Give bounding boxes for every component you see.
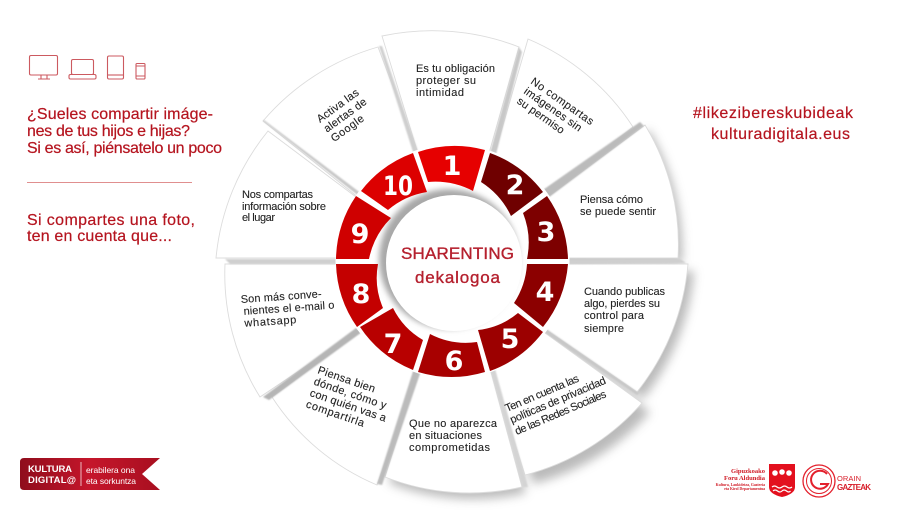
- segment 5: [478, 313, 543, 371]
- text: panel 3: Piensa cómo: [580, 194, 643, 206]
- text: panel 3: [580, 194, 656, 218]
- segment 8: [336, 264, 383, 327]
- text: panel 9: el lugar: [242, 212, 275, 224]
- text: panel 3: se puede sentir: [580, 206, 656, 218]
- text: panel 2: [515, 76, 596, 148]
- icon: monitor: [30, 56, 58, 79]
- text: panel 1: proteger su: [416, 75, 476, 87]
- ring segments: [336, 146, 568, 377]
- icon: G ring: [803, 465, 835, 497]
- logo: Gipuzkoako Foru Aldundia: [716, 464, 795, 497]
- text: panel 2: su permiso: [515, 95, 566, 137]
- text: panel 5: [503, 363, 613, 438]
- text: panel 9: Nos compartas: [242, 189, 314, 201]
- panel 10: [263, 47, 430, 215]
- text: panel 7: Piensa bien: [316, 364, 377, 395]
- wheel: [216, 31, 694, 499]
- numbers: 6: [445, 346, 463, 377]
- text: panel 8: Son más conve-: [240, 288, 322, 306]
- segment 4: [514, 264, 568, 327]
- numbers: [351, 151, 555, 377]
- banner: Kultura Digital: eta sorkuntza: [86, 476, 136, 486]
- text: panel 6: comprometidas: [409, 442, 490, 454]
- hashtag and website: kulturadigitala.eus: [711, 126, 850, 143]
- text: panel 1: [416, 63, 495, 99]
- center title: [401, 244, 514, 287]
- subheading: [27, 212, 195, 245]
- subheading: Si compartes una foto,: [27, 212, 195, 229]
- logo: Orain Gazteak: [803, 465, 871, 497]
- ring background: [336, 144, 570, 378]
- text: panel 8: [240, 288, 336, 330]
- segment 1: [418, 146, 485, 191]
- numbers: 5: [501, 324, 519, 355]
- logo: Gipuzkoako Foru Aldundia: eta Kirol Departamentua: [724, 487, 765, 491]
- text: panel 1: intimidad: [416, 87, 464, 99]
- panel 9: [216, 131, 380, 258]
- text: panel 7: [304, 364, 396, 436]
- text: panel 6: en situaciones: [409, 430, 482, 442]
- heading: question: [27, 106, 222, 157]
- numbers: 1: [443, 151, 461, 182]
- text: panel 2: imágenes sin: [521, 85, 584, 134]
- segment 2: [481, 153, 543, 216]
- panel 7: [272, 320, 425, 485]
- subheading: ten en cuenta que...: [27, 228, 172, 245]
- icon: phone: [136, 64, 145, 79]
- center disc: [386, 195, 522, 331]
- panel 5: [485, 322, 642, 475]
- numbers: 9: [351, 219, 369, 250]
- text: panel 4: algo, pierdes su: [584, 298, 660, 310]
- logo: Gipuzkoako Foru Aldundia: Gipuzkoako: [731, 468, 765, 475]
- segment 6: [418, 334, 485, 377]
- text: panel 6: Que no aparezca: [409, 418, 498, 430]
- center title: SHARENTING: [401, 244, 514, 263]
- logo: Orain Gazteak: ORAIN: [837, 474, 861, 483]
- text: panel 9: información sobre: [242, 201, 326, 213]
- panel 8: [225, 264, 375, 397]
- text: panel 9: [242, 189, 326, 224]
- panel 2: [490, 39, 633, 215]
- inner shadow crescent: [379, 189, 519, 329]
- heading: question: ¿Sueles compartir imáge-: [27, 106, 213, 123]
- segment 3: [523, 196, 568, 259]
- text: panel 10: [315, 86, 376, 145]
- text: panel 5: Ten en cuenta las: [503, 373, 581, 415]
- center title: dekalogoa: [415, 268, 501, 287]
- text: panel 7: con quién vas a: [308, 387, 389, 425]
- hashtag and website: [693, 105, 854, 143]
- text: panel 1: Es tu obligación: [416, 63, 495, 75]
- numbers: 7: [384, 329, 402, 360]
- segment 9: [336, 196, 391, 259]
- icons: devices: [30, 56, 145, 79]
- numbers: 8: [352, 279, 370, 310]
- text: panel 2: No compartas: [528, 76, 596, 128]
- panel 3: [530, 125, 678, 258]
- numbers: 2: [506, 170, 524, 201]
- icon: laptop: [69, 60, 96, 79]
- banner: Kultura Digital: KULTURA: [28, 464, 72, 475]
- text: panel 10: Activa las: [315, 87, 362, 125]
- text: panel 4: siempre: [584, 323, 624, 335]
- segment 7: [360, 308, 423, 370]
- numbers: 10: [383, 171, 413, 202]
- text: panel 6: [409, 418, 498, 454]
- separator strips: [225, 46, 686, 487]
- panel 1: [382, 31, 519, 185]
- numbers: 4: [536, 277, 554, 308]
- text: panel 7: compartirla: [304, 399, 367, 430]
- text: panel 10: alertas de: [322, 96, 369, 135]
- heading: question: Si es así, piénsatelo un poco: [27, 140, 222, 157]
- banner: Kultura Digital: DIGITAL@: [28, 475, 76, 486]
- panel shadows: [389, 130, 694, 499]
- banner: Kultura Digital: erabilera ona: [86, 465, 135, 475]
- text: panel 8: nientes el e-mail o: [243, 300, 335, 318]
- logo: Orain Gazteak: GAZTEAK: [837, 483, 871, 492]
- text: panel 4: Cuando publicas: [584, 286, 666, 298]
- segment 10: [361, 153, 427, 210]
- text: panel 4: control para: [584, 310, 645, 322]
- text: panel 8: whatsapp: [243, 314, 297, 330]
- text: panel 5: políticas de privacidad: [508, 375, 608, 426]
- text: panel 10: Google: [329, 113, 367, 145]
- heading: question: nes de tus hijos e hijas?: [27, 123, 190, 140]
- icon: tablet: [108, 56, 124, 79]
- banner: Kultura Digital: [20, 458, 160, 490]
- panel 6: [385, 350, 522, 493]
- numbers: 3: [537, 217, 555, 248]
- logo: Gipuzkoako Foru Aldundia: Kultura, Lankidetza, Gazteria: [716, 483, 765, 487]
- logo: Gipuzkoako Foru Aldundia: Foru Aldundia: [724, 475, 766, 482]
- text: panel 4: [584, 286, 666, 335]
- text: panel 5: de las Redes Sociales: [513, 388, 609, 438]
- panel 4: [520, 264, 688, 392]
- text: panel 7: dónde, cómo y: [312, 376, 388, 412]
- icon: shield: [769, 464, 795, 497]
- hashtag and website: #likezibereskubideak: [693, 105, 854, 122]
